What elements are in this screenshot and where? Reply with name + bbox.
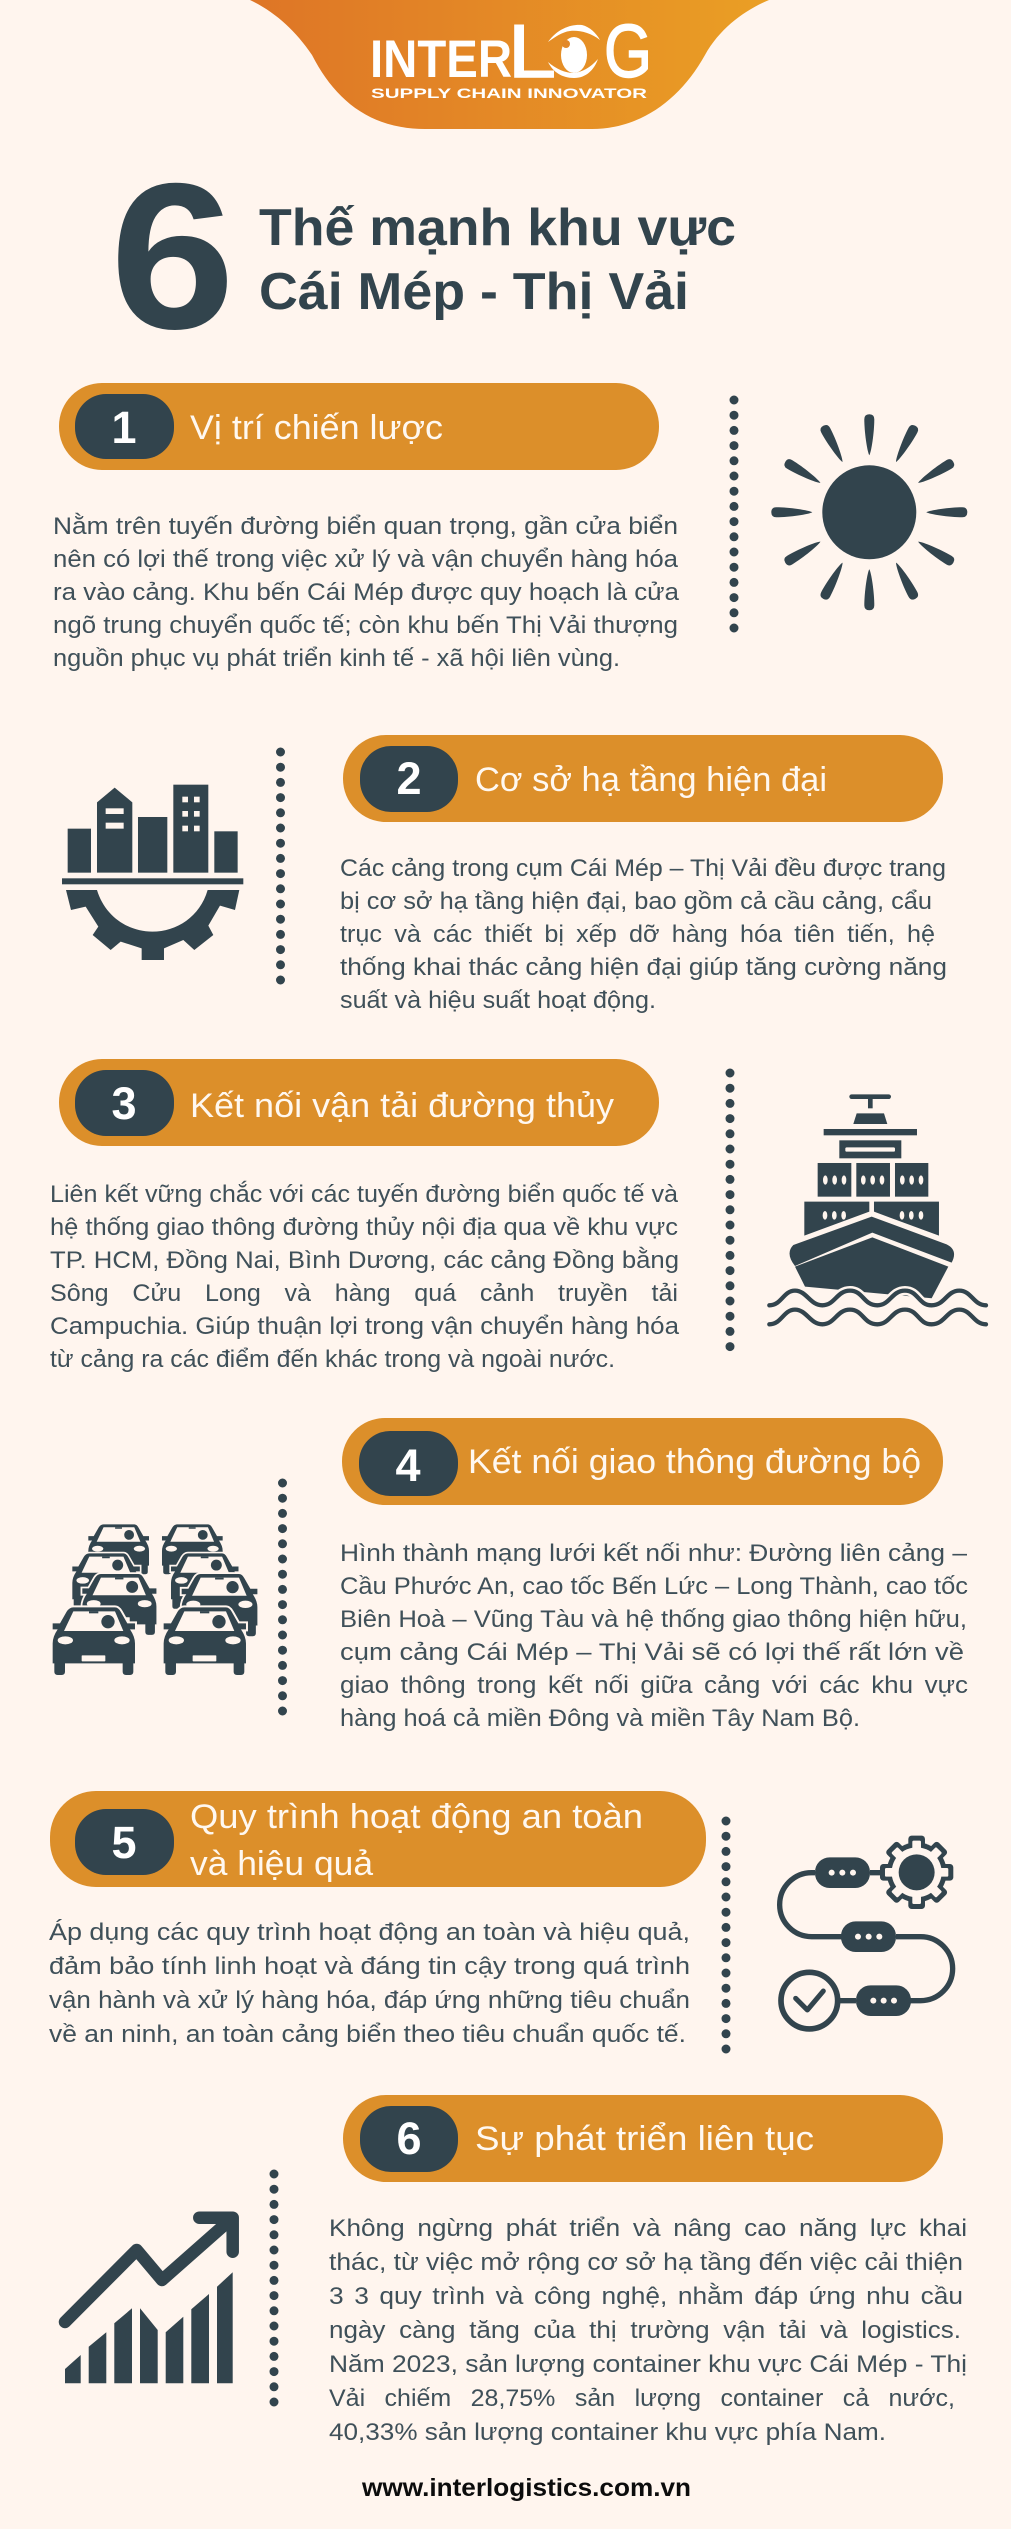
panel 2: modern infrastructure: [62, 735, 947, 1014]
body text 3: Campuchia. Giúp thuận lợi trong vận chuyển hàng hóa: [50, 1313, 680, 1340]
body text 3: hệ thống giao thông đường thủy nội địa qua về khu vực: [50, 1214, 678, 1241]
panel 1: strategic location: [53, 383, 967, 672]
logo wordmark: [370, 9, 652, 93]
panel 5: safe efficient process: [49, 1791, 953, 2050]
panel 4: road connection: [53, 1418, 968, 1732]
body text 6: Năm 2023, sản lượng container khu vực Cái Mép - Thị: [329, 2351, 967, 2378]
body text 4: [340, 1540, 968, 1732]
body text 2: trục và các thiết bị xếp dỡ hàng hóa tiên tiến, hệ: [340, 921, 935, 948]
pill header 5: và hiệu quả: [190, 1845, 373, 1883]
logo banner: [250, 0, 769, 129]
body text 3: Liên kết vững chắc với các tuyến đường biển quốc tế và: [50, 1181, 679, 1208]
logo wordmark: INTER: [370, 30, 512, 89]
body text 1: ra vào cảng. Khu bến Cái Mép được quy hoạch là cửa: [53, 579, 680, 606]
body text 4: hàng hoá cả miền Đông và miền Tây Nam Bộ.: [340, 1705, 860, 1732]
pill header 5: Quy trình hoạt động an toàn: [190, 1798, 643, 1836]
body text 5: [49, 1919, 690, 2048]
pill header 5: 5: [111, 1817, 137, 1868]
icon: sun: [771, 414, 967, 610]
body text 3: TP. HCM, Đồng Nai, Bình Dương, các cảng Đồng bằng: [50, 1247, 679, 1274]
icon: container ship: [769, 1094, 986, 1324]
body text 2: thống khai thác cảng hiện đại giúp tăng cường năng: [340, 954, 947, 981]
pill header 4: [342, 1418, 943, 1505]
body text 5: đảm bảo tính linh hoạt và đáng tin cậy trong quá trình: [49, 1953, 690, 1980]
pill header 2: 2: [396, 753, 422, 804]
pill header 6: 6: [396, 2113, 422, 2164]
pill header 5: [50, 1791, 706, 1887]
icon: process flow with gear and check: [780, 1836, 953, 2029]
body text 1: [53, 513, 680, 672]
body text 1: ngõ trung chuyển quốc tế; còn khu bến Thị Vải thượng: [53, 612, 678, 639]
pill header 3: [59, 1059, 659, 1146]
big number 6: 6: [110, 141, 235, 373]
pill header 2: Cơ sở hạ tầng hiện đại: [475, 761, 827, 799]
pill header 2: [343, 735, 943, 822]
body text 5: về an ninh, an toàn cảng biển theo tiêu chuẩn quốc tế.: [49, 2021, 686, 2048]
pill header 6: [343, 2095, 943, 2182]
pill header 1: [59, 383, 659, 470]
pill header 3: 3: [111, 1078, 137, 1129]
panel 3: waterway connection: [50, 1059, 986, 1373]
footer website: www.interlogistics.com.vn: [361, 2474, 691, 2502]
pill header 4: Kết nối giao thông đường bộ: [468, 1443, 921, 1481]
body text 6: ngày càng tăng của thị trường vận tải và logistics.: [329, 2317, 961, 2344]
body text 3: Sông Cửu Long và hàng quá cảnh truyền tải: [50, 1280, 678, 1307]
icon: city on gear: [62, 785, 243, 960]
body text 6: Không ngừng phát triển và nâng cao năng lực khai: [329, 2215, 967, 2242]
body text 1: nguồn phục vụ phát triển kinh tế - xã hội liên vùng.: [53, 645, 620, 672]
body text 6: 3 3 quy trình và công nghệ, nhằm đáp ứng nhu cầu: [329, 2283, 963, 2310]
body text 2: [340, 855, 947, 1014]
body text 1: Nằm trên tuyến đường biển quan trọng, gần cửa biển: [53, 513, 678, 540]
panel 6: continuous development: [65, 2095, 967, 2446]
body text 6: 40,33% sản lượng container khu vực phía Nam.: [329, 2419, 886, 2446]
pill header 6: Sự phát triển liên tục: [475, 2120, 814, 2158]
heading line 2: Cái Mép - Thị Vải: [259, 263, 689, 321]
logo wordmark: L: [508, 9, 556, 93]
body text 3: [50, 1181, 680, 1373]
logo wordmark: G: [604, 9, 652, 93]
body text 5: Áp dụng các quy trình hoạt động an toàn và hiệu quả,: [49, 1919, 690, 1946]
pill header 1: Vị trí chiến lược: [190, 409, 443, 447]
title: [110, 141, 736, 373]
body text 2: Các cảng trong cụm Cái Mép – Thị Vải đều được trang: [340, 855, 946, 882]
body text 4: giao thông trong kết nối giữa cảng với các khu vực: [340, 1672, 968, 1699]
body text 6: Vải chiếm 28,75% sản lượng container cả nước,: [329, 2385, 955, 2412]
body text 3: từ cảng ra các điểm đến khác trong và ngoài nước.: [50, 1346, 615, 1373]
body text 4: Cầu Phước An, cao tốc Bến Lức – Long Thành, cao tốc: [340, 1573, 968, 1600]
icon: rising chart with arrow: [65, 2218, 233, 2383]
body text 6: [329, 2215, 967, 2446]
body text 6: thác, từ việc mở rộng cơ sở hạ tầng đến việc cải thiện: [329, 2249, 963, 2276]
pill header 4: 4: [395, 1440, 421, 1491]
pill header 1: 1: [111, 402, 137, 453]
heading line 1: Thế mạnh khu vực: [259, 199, 736, 257]
body text 4: Biên Hoà – Vũng Tàu và hệ thống giao thông hiện hữu,: [340, 1606, 967, 1633]
body text 2: bị cơ sở hạ tầng hiện đại, bao gồm cả cầu cảng, cẩu: [340, 888, 932, 915]
icon: traffic of cars: [53, 1524, 257, 1675]
pill header 3: Kết nối vận tải đường thủy: [190, 1087, 614, 1125]
body text 4: Hình thành mạng lưới kết nối như: Đường liên cảng –: [340, 1540, 968, 1567]
body text 5: vận hành và xử lý hàng hóa, đáp ứng những tiêu chuẩn: [49, 1987, 690, 2014]
body text 1: nên có lợi thế trong việc xử lý và vận chuyển hàng hóa: [53, 546, 679, 573]
body text 4: cụm cảng Cái Mép – Thị Vải sẽ có lợi thế rất lớn về: [340, 1639, 964, 1666]
logo tagline: SUPPLY CHAIN INNOVATOR: [371, 85, 647, 101]
body text 2: suất và hiệu suất hoạt động.: [340, 987, 656, 1014]
